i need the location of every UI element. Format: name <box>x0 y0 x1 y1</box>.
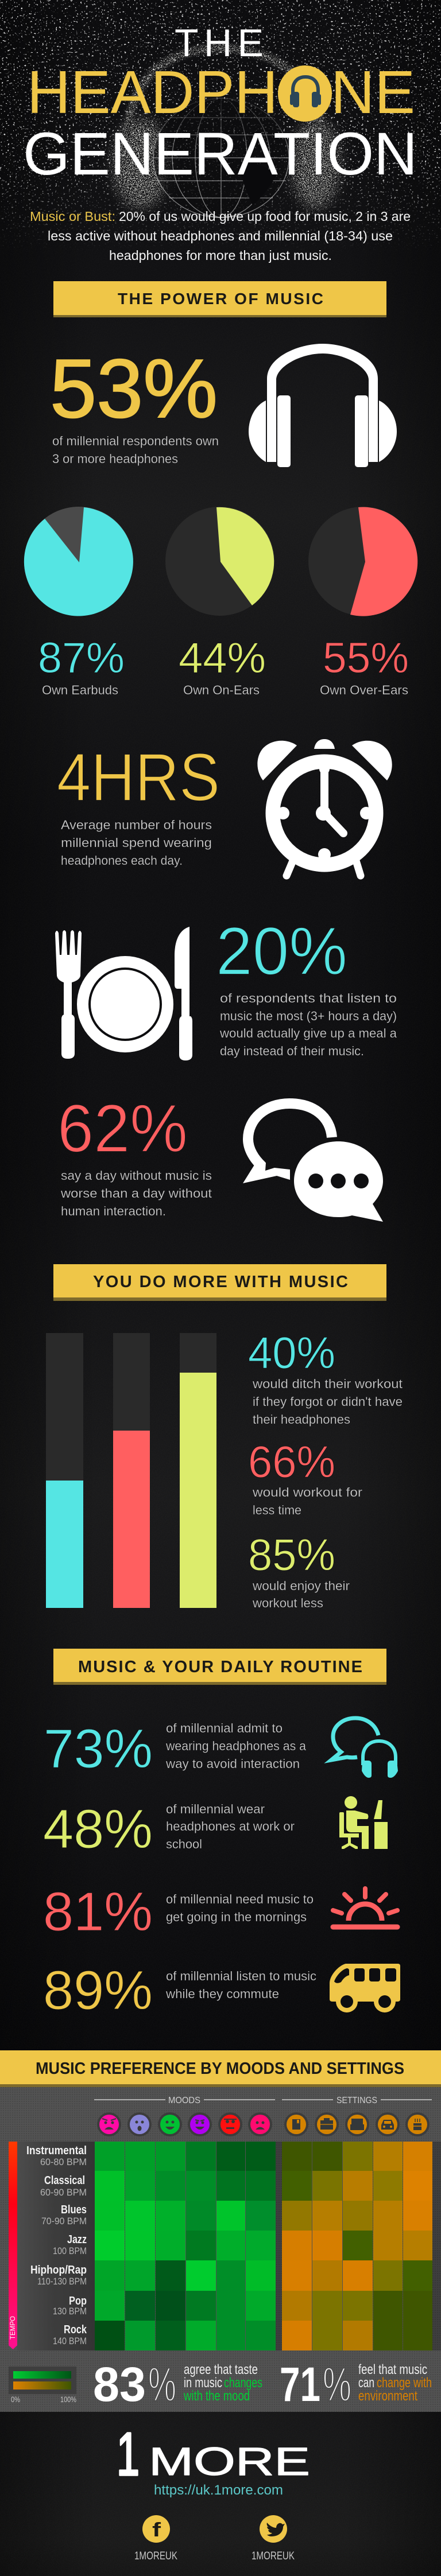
icon: headphone badge <box>278 65 332 122</box>
social: facebook: 1MOREUK <box>134 2550 177 2562</box>
panel: music preference heatmap <box>0 2050 441 2412</box>
row labels: 70-90 BPM <box>41 2216 87 2227</box>
icon: sunrise <box>333 1889 397 1927</box>
stat: 81% mornings: get going in the mornings <box>166 1910 307 1924</box>
icon: alarm clock <box>257 739 392 876</box>
stat: 53% headphones: 3 or more headphones <box>52 452 178 466</box>
social: facebook <box>134 2515 177 2562</box>
pie chart: earbuds: Own Earbuds <box>42 683 118 697</box>
moods header: MOODS <box>168 2096 200 2105</box>
banner: music and your daily routine: MUSIC & YOUR DAILY ROUTINE <box>78 1658 362 1676</box>
settings header: SETTINGS <box>336 2096 377 2105</box>
stat: 73% avoid interaction: way to avoid interaction <box>165 1757 300 1771</box>
heatmap: moods <box>95 2142 276 2350</box>
intro text: 20% of us would give up food for music, 2 in 3 are <box>119 209 411 224</box>
stat: 40% ditch workout: if they forgot or didn't have <box>253 1394 403 1409</box>
stat: 73% avoid interaction: wearing headphones as a <box>165 1739 307 1753</box>
row labels: 140 BPM <box>53 2336 87 2346</box>
row labels: 100 BPM <box>53 2245 87 2256</box>
stat: 48% work or school: of millennial wear <box>166 1802 265 1816</box>
heatmap legend <box>9 2367 76 2404</box>
icon: person at desk <box>339 1796 388 1849</box>
icon: speech bubbles <box>243 1104 383 1222</box>
heatmap: settings <box>282 2142 432 2350</box>
stat: 40% ditch workout <box>248 1327 403 1427</box>
header starfield with headphone and globe <box>0 0 441 252</box>
pie chart: over-ears: 55% <box>323 634 409 682</box>
stat: 40% ditch workout: would ditch their workout <box>252 1377 403 1391</box>
stat: 71% environment: environment <box>358 2388 417 2404</box>
row labels: 130 BPM <box>53 2306 87 2317</box>
row labels: Classical <box>44 2174 85 2187</box>
stat: 89% commute: 89% <box>43 1960 153 2021</box>
intro text: less active without headphones and millennial (18-34) use <box>48 228 393 243</box>
stat: 53% headphones: 53% <box>50 342 218 435</box>
stat: 71% environment: can <box>358 2375 374 2391</box>
stat: 71% environment: % <box>323 2357 351 2411</box>
stat: 20% give up a meal: would actually give up a meal a <box>219 1026 397 1040</box>
row labels: Hiphop/Rap <box>30 2264 87 2276</box>
stat: 85% enjoy less: workout less <box>252 1596 323 1610</box>
stat: 20% give up a meal: of respondents that listen to <box>220 991 397 1005</box>
stat: 4 hours: 4HRS <box>57 740 220 815</box>
icons: mood faces <box>97 2112 272 2136</box>
tempo arrow <box>9 2142 17 2349</box>
pie chart: on-ears: 44% <box>179 634 266 682</box>
row labels: Blues <box>61 2204 87 2216</box>
stat: 53% headphones: of millennial respondents own <box>52 434 219 448</box>
tempo arrow: TEMPO <box>9 2316 17 2340</box>
stat: 83% mood: in music <box>184 2375 222 2391</box>
banner: music and your daily routine <box>53 1649 386 1685</box>
heatmap legend: 100% <box>60 2395 76 2404</box>
row labels: Pop <box>69 2295 87 2307</box>
intro text: Music or Bust: <box>30 209 115 224</box>
banner: you do more with music: YOU DO MORE WITH MUSIC <box>93 1273 348 1291</box>
stat: 83% mood: agree that taste <box>184 2362 258 2377</box>
icon: bus <box>330 1964 400 2012</box>
banner: the power of music <box>53 281 386 317</box>
icons: settings <box>284 2112 430 2136</box>
stat: 66% less time: would workout for <box>252 1485 362 1499</box>
stat: 89% commute: of millennial listen to music <box>166 1969 316 1983</box>
title line: HEADPHONE: NE <box>331 59 415 126</box>
stat: 85% enjoy less: 85% <box>248 1529 335 1580</box>
stat: 73% avoid interaction: 73% <box>44 1718 153 1780</box>
website link: https://uk.1more.com <box>154 2482 283 2498</box>
title <box>23 21 417 188</box>
stat: 62% without music: 62% <box>57 1091 188 1167</box>
stat: 62% without music <box>57 1091 212 1218</box>
stat: 4 hours: millennial spend wearing <box>61 836 212 850</box>
stat: 83% mood: changes <box>224 2375 262 2391</box>
logo: 1MORE: 1 <box>117 2420 140 2488</box>
title line: HEADPHONE: HEADPH <box>27 59 278 126</box>
stat: 62% without music: human interaction. <box>61 1204 166 1218</box>
stat: 83% mood: % <box>148 2357 176 2411</box>
banner: the power of music: THE POWER OF MUSIC <box>118 290 323 308</box>
row labels: 60-90 BPM <box>40 2187 87 2198</box>
stat: 85% enjoy less <box>248 1529 350 1610</box>
stat: 73% avoid interaction: of millennial admit to <box>166 1721 283 1735</box>
stat: 81% mornings <box>43 1881 314 1942</box>
icon: plate and cutlery <box>55 927 192 1060</box>
pie chart: on-ears <box>165 507 274 697</box>
stat: 20% give up a meal: 20% <box>216 914 347 989</box>
icon: fork <box>55 930 82 1059</box>
stat: 81% mornings: 81% <box>43 1881 153 1942</box>
stat: 48% work or school <box>43 1798 295 1860</box>
stat: 89% commute <box>43 1960 316 2021</box>
stat: 83% mood <box>93 2357 262 2411</box>
bar chart: workout <box>46 1333 216 1608</box>
intro text <box>30 209 411 263</box>
stat: 66% less time: 66% <box>248 1436 335 1487</box>
heatmap legend: 0% <box>11 2395 20 2404</box>
stat: 62% without music: worse than a day without <box>60 1186 212 1200</box>
stat: 40% ditch workout: their headphones <box>253 1412 350 1427</box>
pie chart: earbuds: 87% <box>38 634 125 682</box>
stat: 4 hours: Average number of hours <box>61 818 212 832</box>
stat: 20% give up a meal: day instead of their music. <box>220 1044 364 1058</box>
logo: 1MORE <box>117 2420 310 2488</box>
row labels: Rock <box>64 2324 87 2336</box>
stat: 66% less time: less time <box>253 1503 301 1517</box>
social: facebook: f <box>152 2519 161 2541</box>
stat: 4 hours: headphones each day. <box>61 853 183 868</box>
stat: 85% enjoy less: would enjoy their <box>252 1579 350 1593</box>
row labels: Jazz <box>67 2233 87 2246</box>
stat: 20% give up a meal: music the most (3+ hours a day) <box>220 1009 397 1023</box>
pie chart: over-ears: Own Over-Ears <box>320 683 408 697</box>
logo: 1MORE: MORE <box>149 2439 310 2484</box>
title line: GENERATION: GENERATION <box>23 121 417 188</box>
row labels: 110-130 BPM <box>37 2276 87 2287</box>
stat: 83% mood: with the mood <box>183 2388 250 2404</box>
stat: 71% environment <box>280 2357 432 2411</box>
stat: 71% environment: 71 <box>280 2357 320 2411</box>
title line: THE: THE <box>175 21 264 65</box>
icon: bubble and headphones <box>331 1718 398 1778</box>
social: twitter: 1MOREUK <box>252 2550 295 2562</box>
stat: 73% avoid interaction <box>44 1718 307 1780</box>
stat: 48% work or school: 48% <box>43 1798 153 1860</box>
stat: 20% give up a meal <box>216 914 397 1058</box>
pie chart: over-ears <box>308 507 417 697</box>
pie chart: earbuds <box>24 507 133 697</box>
stat: 4 hours <box>57 740 220 868</box>
stat: 89% commute: while they commute <box>165 1987 279 2001</box>
stat: 62% without music: say a day without music is <box>61 1168 212 1183</box>
social: twitter <box>252 2515 295 2562</box>
banner: you do more with music <box>53 1264 386 1301</box>
banner: music preference by moods and settings: MUSIC PREFERENCE BY MOODS AND SETTINGS <box>36 2060 404 2078</box>
intro text: headphones for more than just music. <box>109 248 332 263</box>
title line: HEADPHONE: O <box>281 59 330 126</box>
icon: headphones <box>249 344 397 467</box>
icon: knife <box>175 927 192 1060</box>
row labels: 60-80 BPM <box>40 2157 87 2167</box>
stat: 48% work or school: school <box>166 1837 202 1851</box>
row labels <box>26 2144 87 2346</box>
row labels: Instrumental <box>26 2144 87 2157</box>
banner: music preference by moods and settings <box>0 2050 441 2087</box>
stat: 48% work or school: headphones at work or <box>166 1819 295 1833</box>
stat: 83% mood: 83 <box>93 2357 146 2411</box>
stat: 66% less time <box>248 1436 362 1517</box>
stat: 81% mornings: of millennial need music to <box>166 1892 314 1906</box>
title line: HEADPHONE <box>27 59 415 126</box>
pie chart: on-ears: Own On-Ears <box>183 683 260 697</box>
icon: plate <box>77 956 173 1052</box>
stat: 40% ditch workout: 40% <box>248 1327 335 1378</box>
